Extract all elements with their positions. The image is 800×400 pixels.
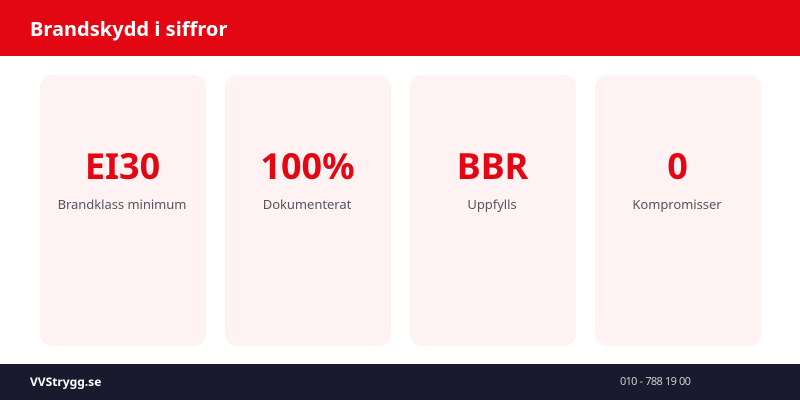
stat label: Kompromisser (632, 195, 722, 213)
panel: 0 (595, 75, 761, 346)
header bar (0, 0, 800, 56)
footer brand: VVStrygg.se (30, 373, 101, 390)
stat label: Dokumenterat (263, 195, 351, 213)
footer phone: 010 - 788 19 00 (620, 374, 690, 388)
panel: EI30 (40, 75, 206, 346)
stat value: EI30 (85, 141, 160, 190)
panel: BBR (410, 75, 576, 346)
stat label: Uppfylls (467, 195, 517, 213)
title: Brandskydd i siffror (30, 15, 227, 42)
stat value: BBR (457, 141, 528, 190)
stat value: 0 (667, 141, 688, 190)
footer bar (0, 364, 800, 400)
stat value: 100% (260, 141, 355, 190)
panel: 100% (225, 75, 391, 346)
stat label: Brandklass minimum (58, 195, 186, 213)
